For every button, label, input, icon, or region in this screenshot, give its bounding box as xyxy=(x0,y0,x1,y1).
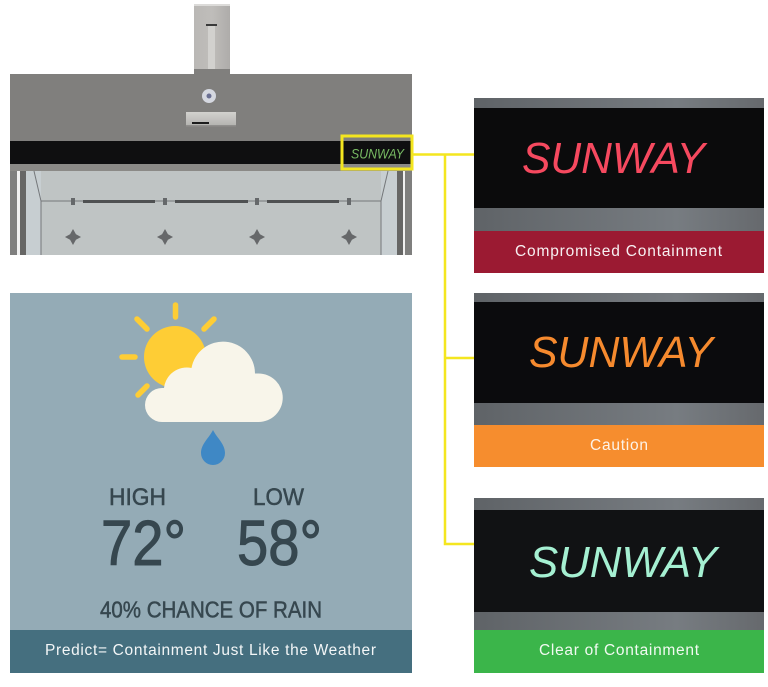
panel: compromised containment xyxy=(474,98,764,273)
yellow connector lines xyxy=(413,154,474,544)
green panel bottom trim xyxy=(474,612,764,630)
orange panel display xyxy=(474,302,764,403)
high temperature: 72° xyxy=(101,507,186,579)
panel: fume hood illustration xyxy=(10,4,412,255)
red panel display xyxy=(474,108,764,208)
green panel top trim xyxy=(474,498,764,510)
high label: HIGH xyxy=(109,484,166,511)
green SUNWAY text: SUNWAY xyxy=(529,538,720,587)
orange label text: Caution xyxy=(590,437,648,454)
red SUNWAY text: SUNWAY xyxy=(522,134,708,183)
green panel display xyxy=(474,510,764,612)
hood display band xyxy=(10,141,412,164)
icon: sun and cloud with rain xyxy=(122,305,283,465)
red panel bottom trim xyxy=(474,208,764,231)
green label bar xyxy=(474,630,764,673)
red label text: Compromised Containment xyxy=(515,243,723,260)
yellow highlight box xyxy=(342,136,412,169)
red label bar xyxy=(474,231,764,273)
hood upper body xyxy=(10,74,412,141)
weather background xyxy=(10,293,412,630)
low label: LOW xyxy=(253,484,304,511)
hood knob xyxy=(202,89,216,103)
green label text: Clear of Containment xyxy=(539,642,700,659)
red panel top trim xyxy=(474,98,764,108)
hood interior xyxy=(10,171,412,255)
orange panel top trim xyxy=(474,293,764,302)
orange SUNWAY text: SUNWAY xyxy=(529,328,716,377)
caption bar xyxy=(10,630,412,673)
panel: weather forecast xyxy=(10,293,412,673)
orange panel bottom trim xyxy=(474,403,764,425)
small SUNWAY display: SUNWAY xyxy=(351,146,405,162)
low temperature: 58° xyxy=(237,507,322,579)
caption text: Predict= Containment Just Like the Weather xyxy=(45,642,376,659)
hood handle xyxy=(186,112,236,126)
hood exhaust chimney xyxy=(194,4,230,75)
orange label bar xyxy=(474,425,764,467)
panel: clear of containment xyxy=(474,498,764,673)
rain chance: 40% CHANCE OF RAIN xyxy=(100,596,322,622)
panel: caution xyxy=(474,293,764,467)
